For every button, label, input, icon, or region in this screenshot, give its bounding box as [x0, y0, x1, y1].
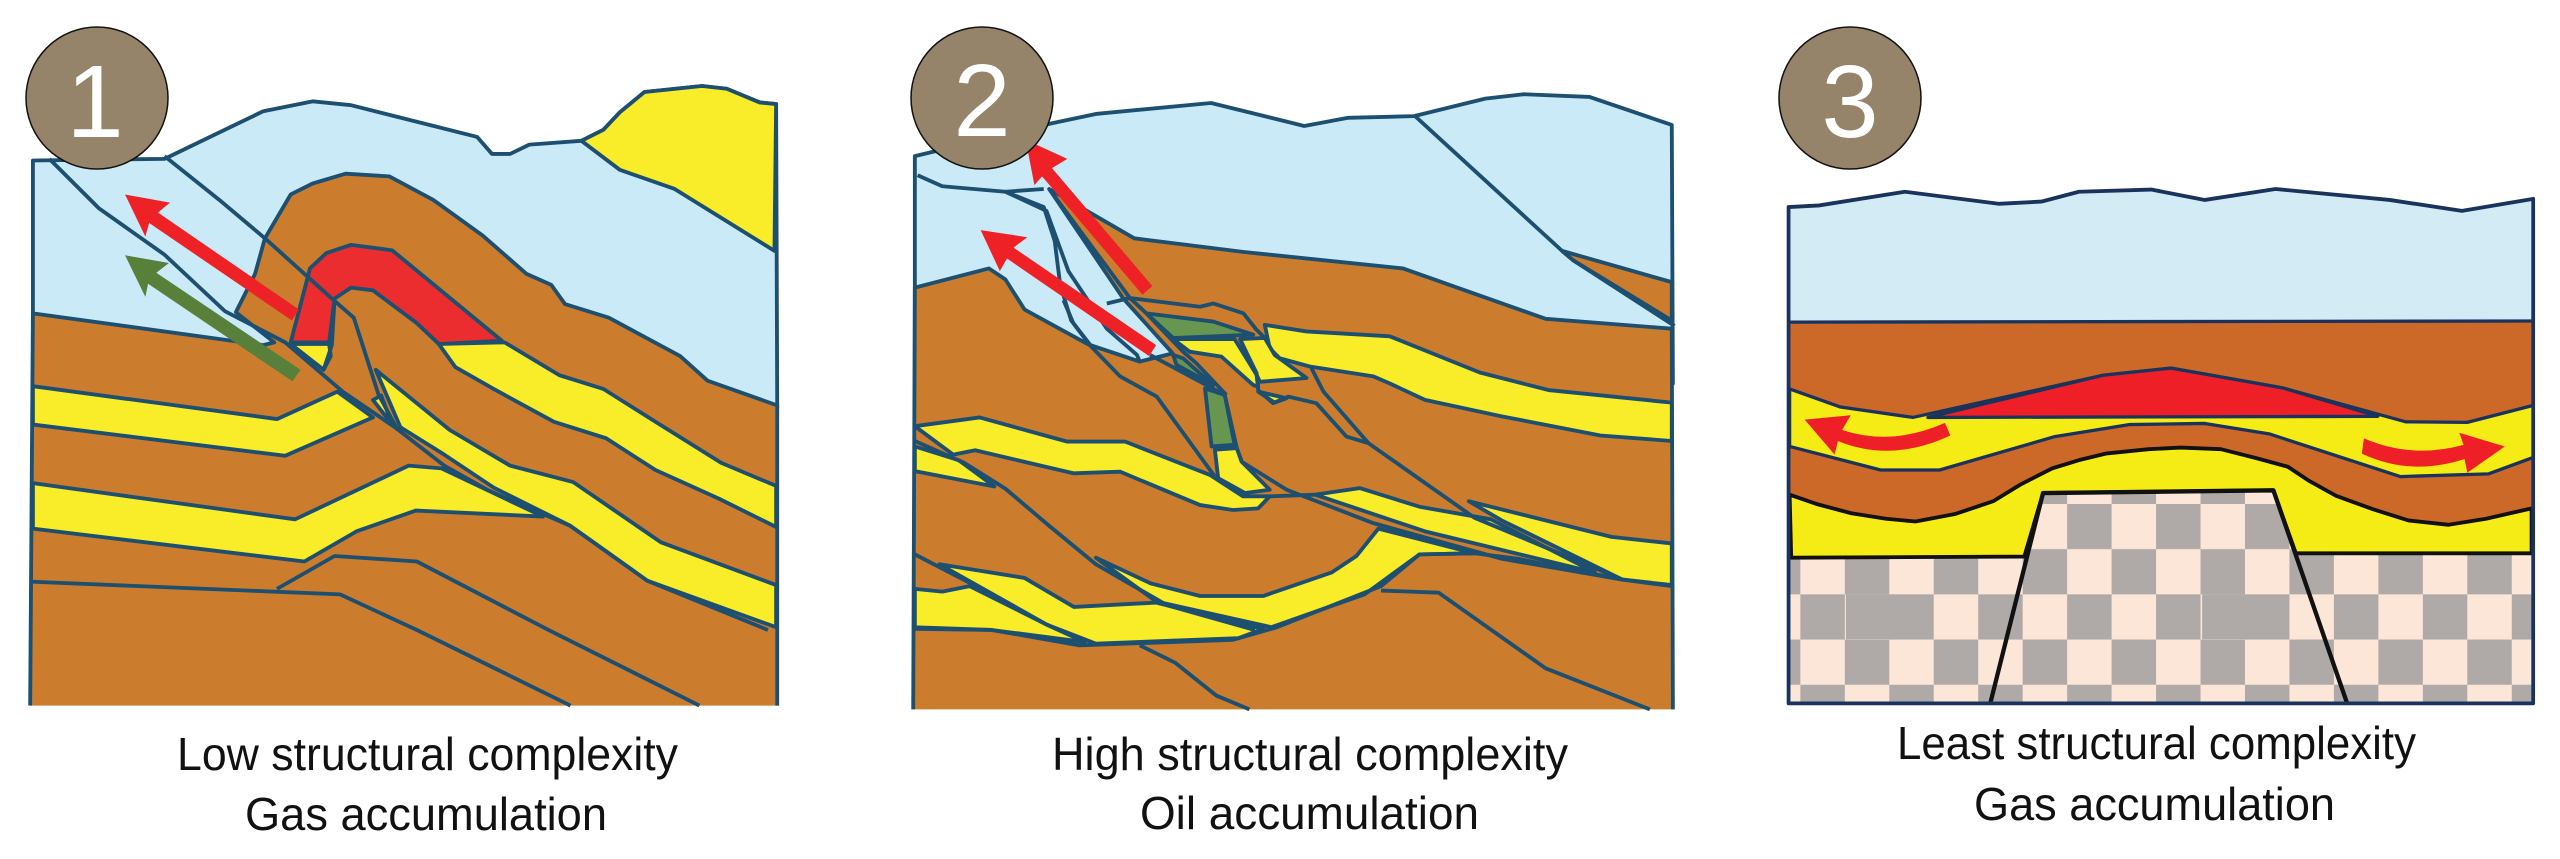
- gas accumulation: [291, 245, 502, 344]
- curved red arrow right: [2362, 433, 2505, 473]
- top of brown line: [1789, 321, 2533, 322]
- brown strata: [913, 189, 1673, 709]
- yellow reservoir layer lower: [1790, 448, 2532, 558]
- sky-blue cover layer: [33, 86, 777, 408]
- panel 2: high complexity cross-section: [913, 94, 1675, 709]
- red migration arrow: [125, 194, 299, 320]
- red migration arrows: [1026, 140, 1152, 295]
- fault lines: [33, 156, 768, 706]
- number badge 3: [1779, 27, 1921, 169]
- caption 2: High structural complexity: [1052, 728, 1568, 780]
- fault lines upper: [1415, 116, 1675, 326]
- panel 3: least complexity cross-section: [1789, 189, 2533, 704]
- caption 3: [1897, 717, 2416, 830]
- caption 1: Gas accumulation: [245, 788, 607, 840]
- curved red arrow left: [1805, 415, 1950, 455]
- checkered basement: [1790, 490, 2533, 704]
- caption 1: [177, 728, 678, 840]
- green migration arrow: [125, 255, 301, 381]
- caption 3: Least structural complexity: [1897, 717, 2416, 769]
- trapezoid structure: [1991, 490, 2347, 702]
- sky-blue cover layer: [915, 94, 1673, 383]
- number badge 1: 1: [66, 44, 124, 159]
- number badge 3: 3: [1821, 44, 1879, 159]
- number badge 1: [26, 27, 168, 169]
- fault lines: [915, 189, 1672, 709]
- blue cover layer: [1789, 189, 2533, 322]
- upper right wedge: [1562, 251, 1672, 320]
- caption 3: Gas accumulation: [1974, 778, 2335, 830]
- yellow layers: [915, 325, 1672, 644]
- panel frame: [1789, 189, 2533, 703]
- number badge 2: [911, 27, 1053, 169]
- caption 2: [1052, 728, 1568, 839]
- caption 1: Low structural complexity: [177, 728, 678, 780]
- oil accumulation: [1146, 313, 1253, 446]
- gas accumulation: [1928, 368, 2378, 417]
- brown upper layer: [1789, 322, 2533, 525]
- panel 1: low complexity cross-section: [30, 86, 777, 706]
- yellow reservoir layer upper: [1790, 368, 2533, 477]
- caption 2: Oil accumulation: [1140, 787, 1479, 839]
- brown strata: [30, 174, 777, 706]
- number badge 2: 2: [953, 43, 1011, 158]
- yellow top right layer: [581, 86, 776, 251]
- yellow layers: [33, 342, 776, 627]
